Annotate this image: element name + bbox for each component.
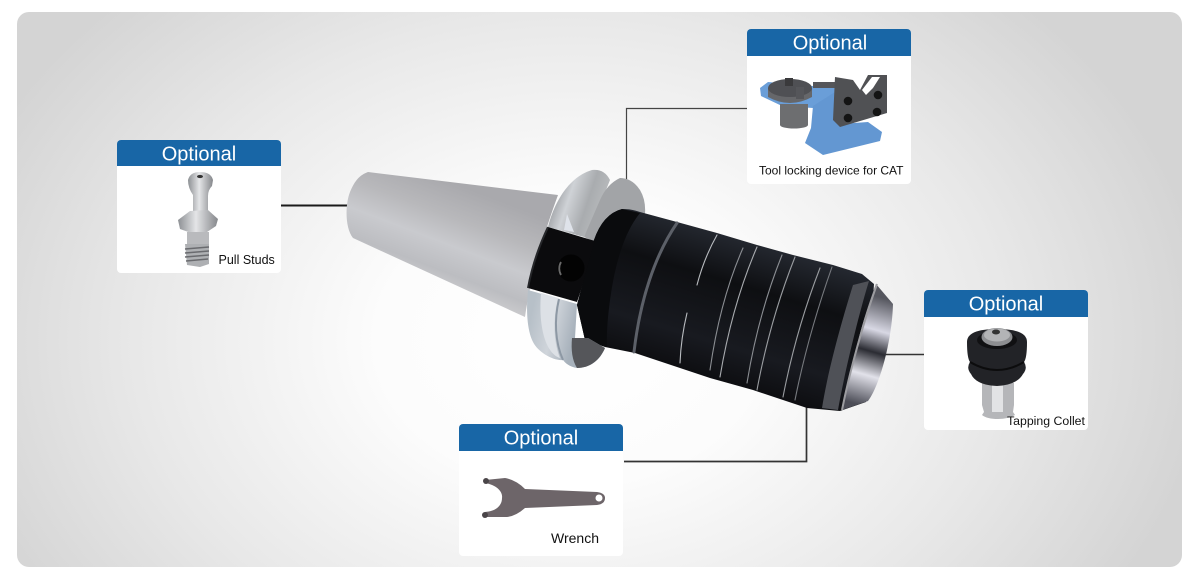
tool flange: rear ring top xyxy=(548,170,610,237)
label: Tapping Collet xyxy=(1007,414,1086,428)
tool shank: cone xyxy=(347,172,558,317)
icon: wrench xyxy=(482,478,605,518)
connector: wrench xyxy=(624,406,806,462)
card heading: Optional xyxy=(969,294,1043,316)
tool flange: front ring top xyxy=(584,178,645,242)
card: tapping collet xyxy=(924,290,1088,430)
icon: tapping collet xyxy=(967,328,1027,419)
card header xyxy=(924,290,1088,317)
tool holder illustration xyxy=(347,170,893,411)
tool flange: lower rings xyxy=(527,290,605,368)
card header xyxy=(459,424,623,451)
tool body: nose ring xyxy=(822,281,893,410)
tool flange: highlights xyxy=(564,214,574,232)
card header xyxy=(117,140,281,166)
label: Tool locking device for CAT xyxy=(759,164,904,178)
card header xyxy=(747,29,911,56)
tool body: black sleeve xyxy=(577,209,874,411)
card heading: Optional xyxy=(793,32,867,54)
connector: pull studs xyxy=(281,204,348,206)
tool flange: black slot band xyxy=(528,227,595,302)
label: Wrench xyxy=(551,530,599,546)
label: Pull Studs xyxy=(218,253,275,267)
card: tool locking device xyxy=(747,29,911,184)
icon: pull stud xyxy=(178,172,218,267)
card heading: Optional xyxy=(162,144,236,166)
icon: locking device xyxy=(760,75,887,155)
card: wrench xyxy=(459,424,623,556)
icon: radial hole xyxy=(558,254,584,282)
connector: tapping collet xyxy=(880,354,924,356)
card heading: Optional xyxy=(504,428,578,450)
card: pull studs xyxy=(117,140,281,273)
tool flange: lower dark face xyxy=(572,338,605,368)
connector: tool locking device xyxy=(626,108,747,184)
